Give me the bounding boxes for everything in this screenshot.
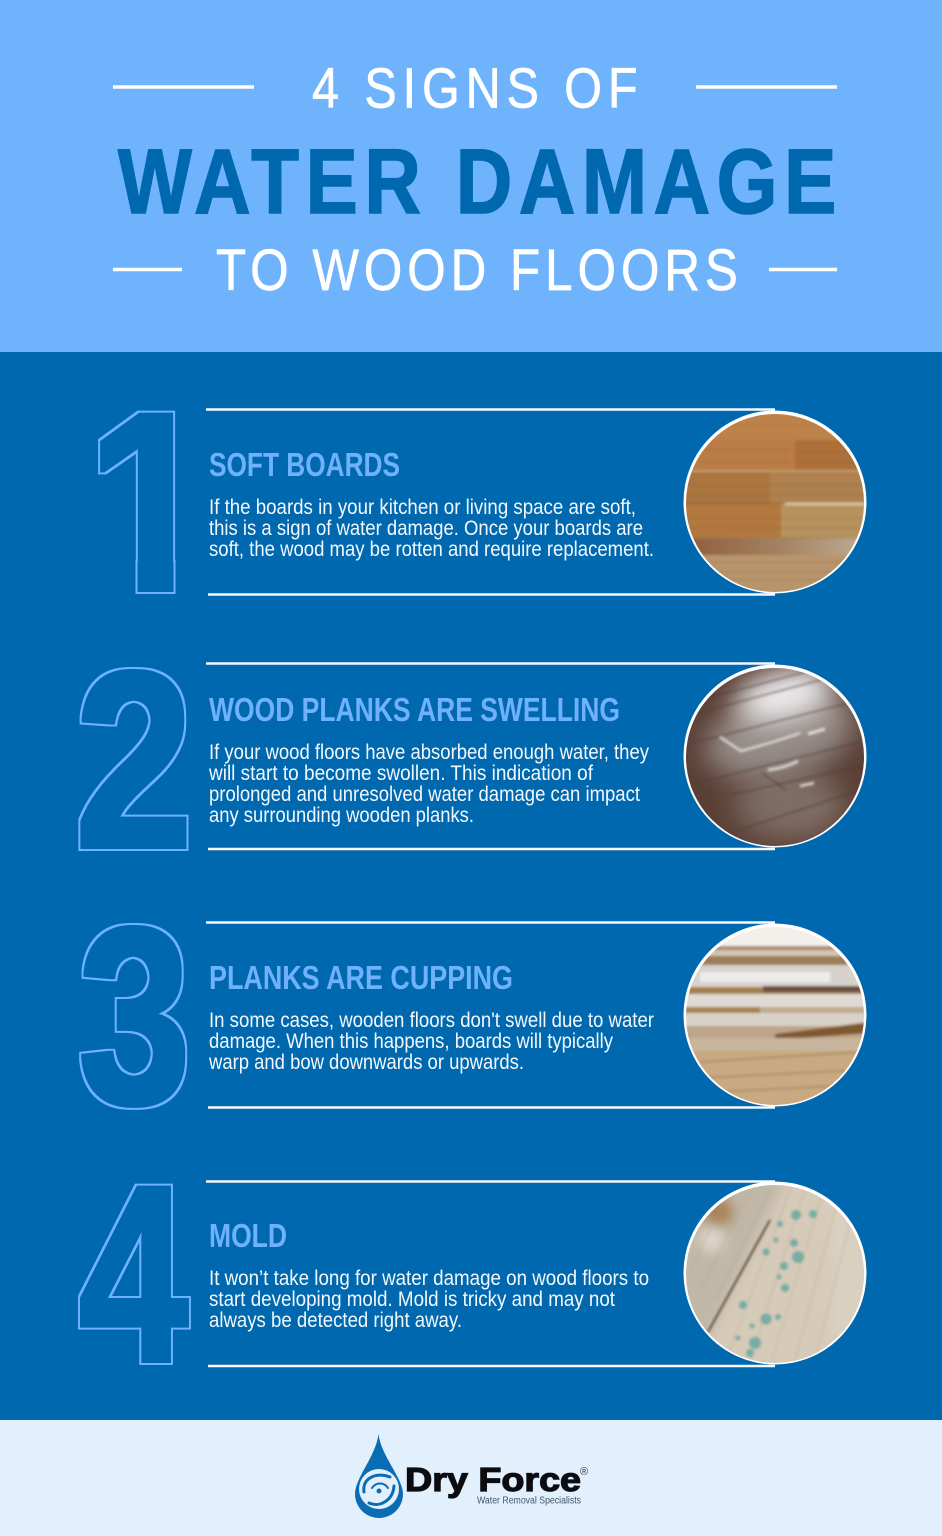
panel: sign 3 planks cupping bbox=[79, 921, 866, 1110]
body text: will start to become swollen. This indication of bbox=[208, 762, 593, 785]
body text: In some cases, wooden floors don't swell due to water bbox=[209, 1009, 654, 1032]
body text: It won’t take long for water damage on wood floors to bbox=[209, 1267, 649, 1290]
footer band bbox=[0, 1420, 942, 1536]
body text: damage. When this happens, boards will typically bbox=[209, 1030, 613, 1053]
main blue panel bbox=[0, 352, 942, 1420]
photo: cupped planks bbox=[680, 920, 870, 1111]
registered mark: ® bbox=[580, 1466, 588, 1478]
body text bbox=[208, 741, 649, 827]
frame lines bbox=[206, 410, 775, 594]
title: TO WOOD FLOORS bbox=[216, 238, 738, 303]
heading: SOFT BOARDS bbox=[209, 446, 400, 483]
title: WATER DAMAGE bbox=[118, 131, 836, 233]
body text: prolonged and unresolved water damage can impact bbox=[209, 783, 640, 806]
photo: oak floor bbox=[684, 410, 866, 594]
number 3: 3 bbox=[78, 876, 190, 1157]
wordmark: Dry Force bbox=[405, 1461, 581, 1498]
tagline: Water Removal Specialists bbox=[477, 1496, 581, 1506]
panel: sign 2 planks swelling bbox=[75, 620, 870, 901]
title bbox=[113, 57, 837, 303]
panel: sign 4 mold bbox=[78, 1180, 866, 1368]
title: 4 SIGNS OF bbox=[312, 57, 638, 120]
number 2: 2 bbox=[75, 620, 193, 901]
logo: Dry Force bbox=[355, 1434, 588, 1518]
frame lines bbox=[206, 922, 775, 1108]
number 1: 1 bbox=[86, 360, 214, 645]
heading: WOOD PLANKS ARE SWELLING bbox=[209, 691, 620, 728]
body text: this is a sign of water damage. Once your boards are bbox=[209, 517, 643, 540]
heading: MOLD bbox=[209, 1217, 287, 1254]
body text bbox=[209, 496, 654, 561]
number 4: 4 bbox=[79, 1134, 188, 1415]
body text: If your wood floors have absorbed enough water, they bbox=[209, 741, 649, 764]
body text: always be detected right away. bbox=[209, 1309, 462, 1332]
body text: start developing mold. Mold is tricky and may not bbox=[209, 1288, 615, 1311]
body text: any surrounding wooden planks. bbox=[209, 804, 474, 827]
heading: PLANKS ARE CUPPING bbox=[209, 959, 513, 996]
body text: soft, the wood may be rotten and require replacement. bbox=[209, 538, 654, 561]
photo: swollen dark planks bbox=[680, 660, 870, 855]
frame lines bbox=[206, 1182, 775, 1366]
panel: sign 1 soft boards bbox=[86, 360, 871, 645]
frame lines bbox=[206, 664, 775, 849]
body text: If the boards in your kitchen or living space are soft, bbox=[209, 496, 636, 519]
header band bbox=[0, 0, 942, 352]
body text bbox=[209, 1267, 649, 1332]
body text bbox=[208, 1009, 654, 1074]
body text: warp and bow downwards or upwards. bbox=[208, 1051, 524, 1074]
icon: water drop with swirl bbox=[355, 1434, 403, 1518]
photo: moldy boards bbox=[680, 1180, 870, 1370]
